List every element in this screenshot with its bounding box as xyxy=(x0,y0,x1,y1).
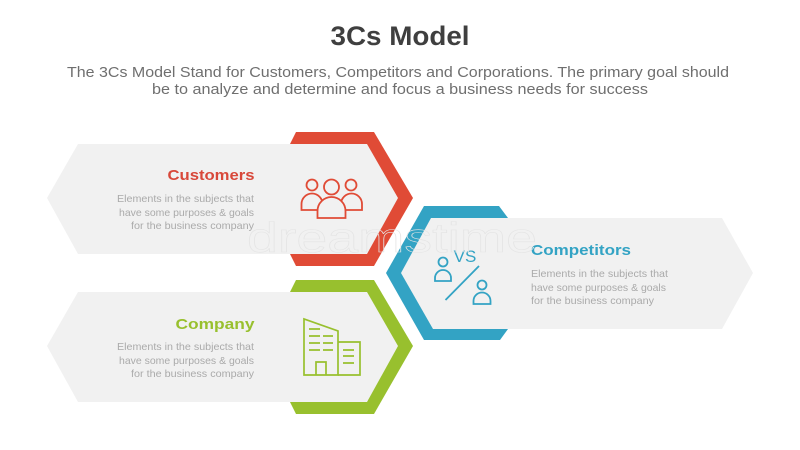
panel: company xyxy=(47,280,413,414)
watermark: dreamstime xyxy=(247,214,537,261)
heading: customers: Customers xyxy=(168,167,254,184)
panel: competitors xyxy=(386,206,753,340)
text: competitors: have some purposes & goals xyxy=(531,282,666,294)
title: 3Cs Model xyxy=(330,21,470,51)
heading: company: Company xyxy=(176,316,255,333)
text: competitors: for the business company xyxy=(531,295,655,307)
hexagon outline: company xyxy=(290,280,413,414)
text: competitors xyxy=(531,268,668,307)
text: company xyxy=(117,341,255,380)
subtitle: be to analyze and determine and focus a business needs for success xyxy=(152,81,648,98)
icon: people xyxy=(302,180,362,218)
text: competitors: Elements in the subjects that xyxy=(531,268,668,280)
text: customers xyxy=(117,193,255,232)
grey arrow panel: company xyxy=(47,292,398,402)
text: customers: have some purposes & goals xyxy=(119,207,254,219)
icon: versus: VS xyxy=(454,247,476,266)
text: company: Elements in the subjects that xyxy=(117,341,254,353)
text: company: for the business company xyxy=(131,368,255,380)
hexagon outline: competitors xyxy=(386,206,508,340)
heading: competitors: Competitors xyxy=(531,242,631,259)
subtitle: The 3Cs Model Stand for Customers, Competitors and Corporations. The primary goal should xyxy=(67,64,729,81)
grey arrow panel: customers xyxy=(47,144,398,254)
icon: building xyxy=(304,319,360,375)
text: customers: for the business company xyxy=(131,220,255,232)
hexagon outline: customers xyxy=(290,132,413,266)
text: customers: Elements in the subjects that xyxy=(117,193,254,205)
text: company: have some purposes & goals xyxy=(119,355,254,367)
grey arrow panel: competitors xyxy=(401,218,753,329)
panel: customers xyxy=(47,132,413,266)
subtitle xyxy=(67,64,729,98)
icon: versus xyxy=(435,247,490,304)
